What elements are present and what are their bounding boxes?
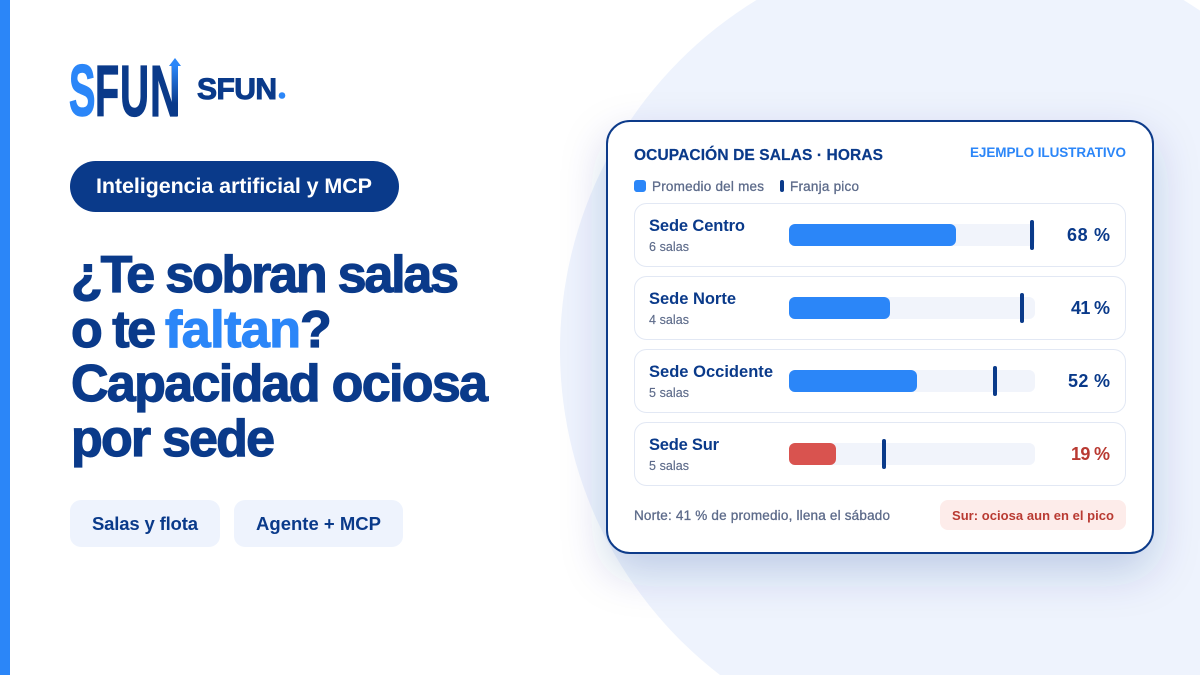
panel: room occupancy card xyxy=(607,121,1153,553)
logo: SFUN wordmark: SFUN xyxy=(197,73,277,106)
title: por sede xyxy=(71,410,275,468)
row: Sede Norte: Sede Norte xyxy=(649,290,736,308)
row: Sede Sur xyxy=(634,422,1126,486)
row: Sede Occidente: 52 % xyxy=(1068,371,1110,391)
row: Sede Centro: Sede Centro xyxy=(649,217,745,235)
title: ? xyxy=(300,301,332,359)
footer note: Norte: 41 % de promedio, llena el sábado xyxy=(634,508,890,523)
row: Sede Centro: 68 % xyxy=(1067,225,1110,245)
legend: Franja pico xyxy=(790,179,859,194)
tag: Agente + MCP xyxy=(234,500,403,547)
legend xyxy=(634,179,859,194)
title: ¿Te sobran salas xyxy=(71,246,459,304)
illustrative example note: EJEMPLO ILUSTRATIVO xyxy=(970,145,1126,160)
row: Sede Norte: 41 % xyxy=(1071,298,1110,318)
left accent bar xyxy=(0,0,10,675)
card heading: OCUPACIÓN DE SALAS · HORAS xyxy=(634,146,883,164)
row: Sede Occidente: Sede Occidente xyxy=(649,363,773,381)
tag: Salas y flota xyxy=(70,500,220,547)
logo: SFUN emblem with arrow: N xyxy=(150,52,180,132)
tag: Salas y flota: Salas y flota xyxy=(92,513,199,534)
logo: SFUN emblem with arrow: S xyxy=(69,51,95,132)
logo: SFUN emblem with arrow: U xyxy=(120,52,149,132)
category pill: Inteligencia artificial y MCP xyxy=(96,174,372,198)
row: Sede Norte: 4 salas xyxy=(649,313,689,327)
alert badge: Sur: ociosa aun en el pico xyxy=(952,508,1114,523)
row: Sede Sur: Sede Sur xyxy=(649,436,720,454)
title: faltan xyxy=(165,301,301,359)
alert badge xyxy=(940,500,1126,530)
row: Sede Centro: 6 salas xyxy=(649,240,689,254)
category pill xyxy=(70,161,399,212)
row: Sede Norte xyxy=(634,276,1126,340)
row: Sede Centro xyxy=(634,204,1126,266)
tag: Agente + MCP: Agente + MCP xyxy=(256,513,381,534)
row: Sede Occidente: 5 salas xyxy=(649,386,689,400)
row: Sede Sur: 19 % xyxy=(1071,444,1110,464)
row: Sede Sur: 5 salas xyxy=(649,459,689,473)
row: Sede Occidente xyxy=(634,350,1126,412)
title: o te xyxy=(71,301,156,359)
title: Capacidad ociosa xyxy=(71,355,489,413)
logo: SFUN emblem with arrow xyxy=(69,51,181,132)
background circle xyxy=(560,0,1200,675)
title xyxy=(71,246,489,468)
legend: Promedio del mes xyxy=(652,179,764,194)
logo: SFUN emblem with arrow: F xyxy=(95,52,119,132)
